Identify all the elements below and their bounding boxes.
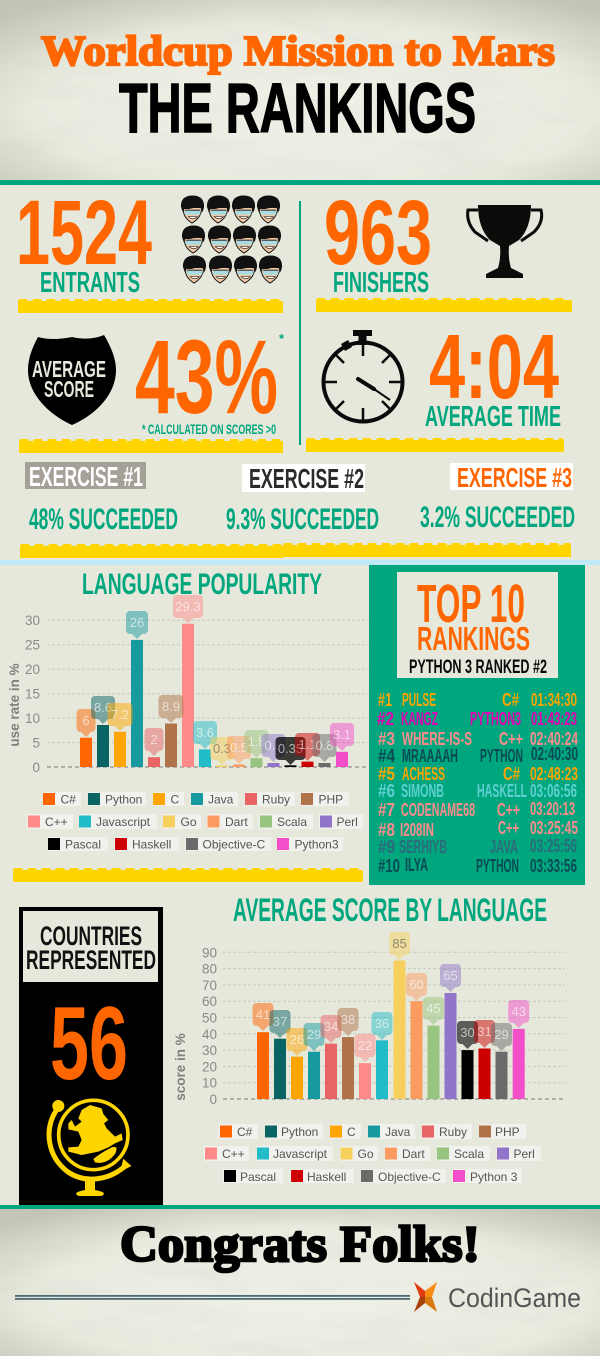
chart: average score by language: 90 [202, 945, 217, 960]
rank 8: C++ [498, 818, 519, 838]
legend: language popularity: Ruby [262, 792, 290, 806]
chart: average score by language: 70 [202, 978, 217, 993]
rank 1: #1 [378, 690, 392, 710]
chart: average score by language: 80 [202, 962, 217, 977]
footnote: * CALCULATED ON SCORES >0 [142, 422, 276, 437]
legend: language popularity: Dart [225, 815, 248, 829]
rank 2 [377, 709, 577, 729]
rank 10: #10 [378, 856, 400, 876]
legend: average score: Objective-C [378, 1170, 441, 1184]
stat: 56: 56 [50, 986, 128, 1102]
rank 6: SIMONB [401, 781, 444, 801]
chart 2 value bubbles [252, 932, 529, 1062]
rank 4: PYTHON [480, 746, 523, 766]
rank 10: ILYA [405, 855, 428, 875]
label: entrants: ENTRANTS [40, 267, 140, 299]
chart 1 value bubbles: 7.2 [111, 707, 129, 722]
chart 1 value bubbles: 29.3 [175, 599, 201, 614]
chart 1 value bubbles: 6 [82, 713, 90, 728]
rank 6: HASKELL [477, 781, 527, 801]
yellow band [13, 870, 363, 882]
rank 3 [378, 729, 578, 749]
rank 2: #2 [377, 709, 394, 729]
legend: average score: C [347, 1125, 356, 1139]
chart: language popularity: 20 [25, 662, 40, 677]
legend: language popularity: PHP [318, 792, 343, 806]
rank 2: PYTHON3 [470, 709, 521, 729]
chart: average score by language [173, 932, 565, 1107]
legend: language popularity: Haskell [132, 838, 171, 852]
rank 7: C++ [497, 800, 520, 820]
exercise 2 label: EXERCISE #2 [249, 463, 364, 494]
rank 2: KANGZ [401, 709, 438, 729]
stat: 1524: 1524 [16, 182, 152, 284]
rank 1: PULSE [402, 690, 436, 710]
chart 2 value bubbles: 41 [256, 1007, 270, 1022]
closing message: Congrats Folks! [120, 1217, 480, 1273]
rank 5 [378, 764, 578, 784]
panel: countries represented [19, 907, 163, 1205]
asterisk: * [279, 331, 285, 346]
rank 6: #6 [378, 781, 395, 801]
countries heading box [23, 911, 158, 982]
legend: language popularity [27, 792, 363, 852]
chart: average score by language: 10 [202, 1076, 217, 1091]
legend: average score [204, 1124, 541, 1184]
chart: language popularity: use rate in % [7, 663, 22, 747]
rank 4 [378, 744, 578, 766]
legend: average score: Dart [402, 1147, 425, 1161]
legend: average score: Python 3 [470, 1170, 518, 1184]
yellow band [316, 300, 572, 312]
rank 7: 03:20:13 [530, 799, 575, 819]
chart 1 value bubbles: 3.6 [196, 725, 214, 740]
top 10 heading box: TOP 10 [417, 574, 525, 634]
rank 9: 03:25:56 [530, 836, 577, 856]
icon: globe [48, 1100, 131, 1196]
legend: language popularity: Javascript [96, 815, 151, 829]
chart 2 value bubbles: 26 [290, 1032, 304, 1047]
chart: average score by language: 30 [202, 1043, 217, 1058]
yellow band [283, 544, 571, 557]
icon: trophy [468, 205, 542, 278]
chart: language popularity: 10 [25, 711, 40, 726]
chart 2 value bubbles: 34 [324, 1019, 338, 1034]
legend: average score: PHP [495, 1125, 520, 1139]
chart 2 value bubbles: 29 [494, 1027, 509, 1042]
rank 8: 03:25:45 [530, 818, 578, 838]
chart 2 value bubbles: 36 [375, 1016, 389, 1031]
yellow band [20, 546, 283, 558]
yellow band [19, 440, 283, 453]
stat: 963: 963 [324, 182, 432, 284]
chart 2 value bubbles: 45 [426, 1001, 441, 1016]
rank 1 [378, 690, 577, 710]
chart 2 value bubbles: 29 [307, 1027, 321, 1042]
chart: average score by language: 20 [202, 1059, 217, 1074]
chart: language popularity: 25 [25, 638, 40, 652]
icon: faces grid [181, 195, 282, 283]
rank 7 [378, 799, 575, 820]
rank 3: 02:40:24 [530, 729, 578, 749]
rank 3: C++ [499, 729, 523, 749]
rank 5: 02:48:23 [530, 764, 578, 784]
legend: average score: C++ [222, 1147, 245, 1161]
chart 1 value bubbles: 1.1 [298, 737, 317, 752]
legend: language popularity: Python3 [294, 838, 339, 852]
legend: language popularity: Objective-C [202, 838, 266, 852]
legend: average score: C# [237, 1125, 253, 1139]
badge: average score shield: AVERAGE [32, 356, 106, 382]
countries heading box: COUNTRIES [40, 921, 142, 951]
legend: average score: Haskell [307, 1170, 346, 1184]
legend: language popularity: Scala [277, 815, 307, 829]
icon: stopwatch [324, 330, 402, 422]
rank 9: #9 [378, 837, 395, 857]
rank 10: PYTHON [476, 856, 519, 876]
heading: language popularity: LANGUAGE POPULARITY [82, 568, 322, 601]
legend: language popularity: C# [60, 792, 76, 806]
legend: average score: Scala [454, 1147, 484, 1161]
rank 9 [378, 836, 577, 857]
rank 8 [378, 818, 578, 840]
double rule [15, 1295, 410, 1300]
rank 5: #5 [378, 764, 395, 784]
chart 1 value bubbles: 26 [130, 615, 144, 630]
legend: language popularity: Perl [336, 815, 358, 829]
chart 1 value bubbles: 2 [150, 732, 158, 747]
chart 1 value bubbles: 0.35 [278, 741, 303, 756]
chart 2 value bubbles: 43 [511, 1004, 526, 1019]
chart: average score by language: 60 [202, 994, 217, 1009]
chart 1 value bubbles: 8.9 [162, 699, 180, 714]
yellow band [306, 440, 564, 452]
label: finishers: FINISHERS [333, 267, 429, 299]
rank 5: C# [503, 764, 520, 784]
rank 9: SERHIYB [399, 837, 447, 857]
legend: average score: Ruby [439, 1125, 467, 1139]
footer panel [0, 1205, 600, 1356]
yellow band [18, 300, 283, 313]
chart 2 value bubbles: 31 [477, 1024, 492, 1039]
exercise 2 result: 9.3% SUCCEEDED [226, 503, 379, 536]
chart 2 value bubbles: 37 [273, 1014, 287, 1029]
exercise 2 label [242, 463, 365, 494]
logo: CodinGame mark [414, 1282, 437, 1312]
rank 6: 03:06:56 [530, 781, 577, 801]
legend: average score: Perl [514, 1147, 535, 1161]
chart: average score by language: 0 [209, 1092, 217, 1107]
rank 10 [378, 855, 577, 876]
chart: average score by language: score in % [173, 1033, 188, 1101]
exercise 1 label: EXERCISE #1 [29, 461, 143, 492]
legend: language popularity: Go [180, 815, 197, 829]
chart 2 value bubbles: 60 [409, 977, 424, 992]
chart 2 value bubbles: 65 [443, 968, 458, 983]
top 10 heading box [397, 572, 558, 678]
legend: average score: Go [358, 1147, 374, 1161]
badge: average score shield [28, 335, 116, 425]
chart 1 value bubbles [76, 595, 354, 765]
top 10 heading box: RANKINGS [417, 620, 530, 657]
chart 1 value bubbles: 3.1 [333, 727, 351, 742]
legend: language popularity: Pascal [65, 838, 101, 852]
chart 1 value bubbles: 8.6 [94, 700, 112, 715]
rank 1: C# [502, 690, 519, 710]
chart 1 value bubbles: 0.5 [230, 740, 248, 755]
chart 2 value bubbles: 85 [392, 936, 407, 951]
header panel [0, 0, 600, 180]
top teal rule [0, 180, 600, 185]
rank 3: WHERE-IS-S [402, 729, 472, 749]
legend: average score: Pascal [240, 1170, 276, 1184]
rank 7: #7 [378, 800, 395, 820]
chart: language popularity [7, 595, 370, 775]
chart 1 value bubbles: 0.8 [315, 738, 334, 753]
rank 9: JAVA [490, 837, 518, 857]
badge: average score shield: SCORE [44, 376, 94, 402]
chart 1 value bubbles: 0.8 [264, 738, 283, 753]
rank 4: #4 [378, 746, 395, 766]
countries heading box: REPRESENTED [26, 945, 156, 975]
chart: language popularity: 15 [25, 686, 40, 702]
rank 8: #8 [378, 820, 395, 840]
chart: language popularity: 0 [32, 760, 40, 775]
legend: average score: Java [385, 1125, 411, 1139]
rank 3: #3 [378, 729, 395, 749]
panel: top 10 rankings [369, 565, 585, 885]
chart: average score by language: 40 [202, 1027, 217, 1042]
legend: average score: Javascript [273, 1147, 328, 1161]
rank 4: MRAAAAH [402, 746, 458, 766]
legend: language popularity: Python [105, 792, 142, 806]
exercise 1 label [25, 461, 146, 492]
legend: language popularity: Java [208, 792, 234, 806]
chart 1 value bubbles: 0.3 [213, 741, 231, 756]
chart: average score by language: 50 [202, 1010, 217, 1026]
chart: language popularity: 5 [32, 736, 40, 750]
light blue divider [0, 560, 600, 565]
rank 8: I208IN [400, 820, 434, 840]
rank 5: ACHESS [402, 764, 445, 784]
logo: CodinGame wordmark: CodinGame [448, 1283, 581, 1313]
footer teal rule [0, 1205, 600, 1209]
stat: 43%: 43% [135, 319, 278, 436]
rank 7: CODENAME68 [401, 800, 475, 820]
legend: language popularity: C++ [45, 815, 68, 829]
chart 2 value bubbles: 22 [358, 1038, 372, 1053]
rank 10: 03:33:56 [530, 856, 577, 876]
chart 2 value bubbles: 30 [460, 1025, 475, 1040]
rank 6 [378, 781, 577, 801]
chart 2 value bubbles: 38 [341, 1012, 355, 1027]
legend: average score: Python [281, 1125, 318, 1139]
chart 1 value bubbles: 1.8 [247, 734, 266, 749]
chart: language popularity: 30 [25, 613, 40, 628]
title: Worldcup Mission to Mars: Worldcup Mission to Mars [41, 29, 555, 75]
exercise 1 result: 48% SUCCEEDED [29, 503, 178, 536]
legend: language popularity: C [170, 792, 180, 806]
